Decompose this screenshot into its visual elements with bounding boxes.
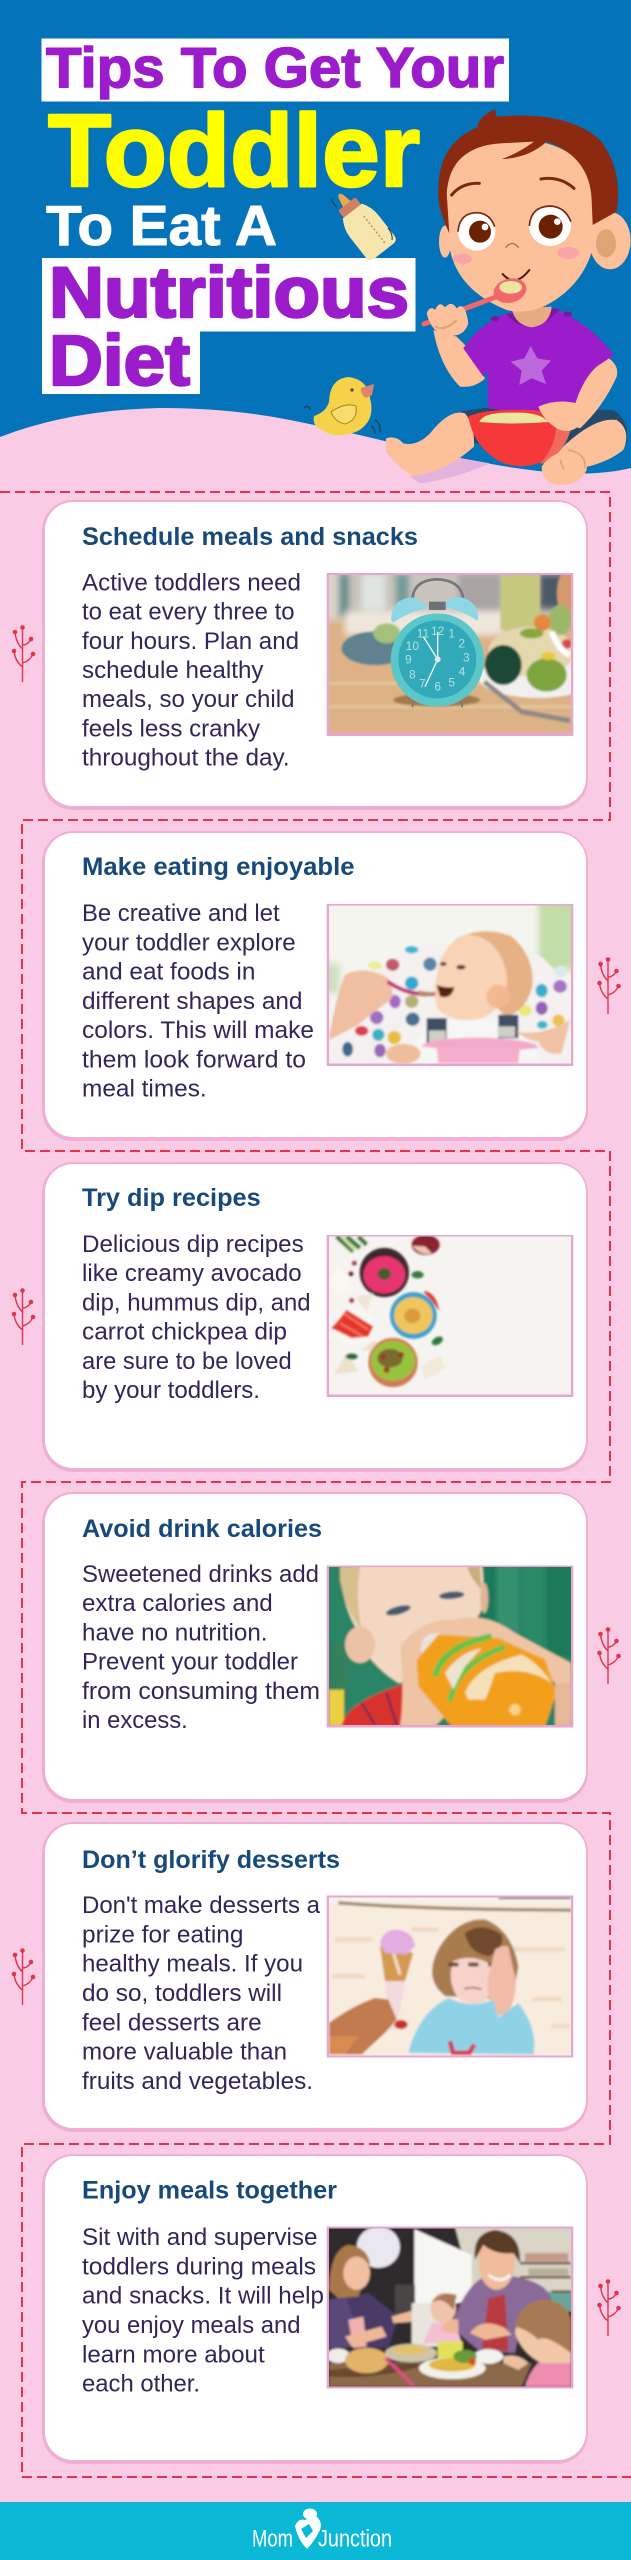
body text: extra calories and [82,1590,273,1617]
body text: throughout the day. [82,744,290,772]
body text: you enjoy meals and [82,2312,300,2339]
body text: Be creative and let [82,900,280,927]
panel: schedule meals and snacks [42,500,598,810]
icon: sprig 5 [12,1948,35,2005]
body text: dip, hummus dip, and [82,1289,311,1316]
nose [506,243,519,248]
body text: from consuming them [82,1678,320,1705]
body text: Don't make desserts a [82,1892,321,1919]
body text: carrot chickpea dip [82,1319,287,1346]
title: Toddler [48,93,420,208]
illustration: toddler eating [386,109,631,485]
left leg [386,412,474,476]
body text: feels less cranky [82,715,260,742]
body text: healthy meals. If you [82,1951,303,1978]
heading: Schedule meals and snacks [82,523,418,551]
body text: feel desserts are [82,2009,262,2036]
body text: Active toddlers need [82,570,301,596]
body text: Delicious dip recipes [82,1231,304,1258]
body text: meal times. [82,1076,207,1102]
title [42,36,509,401]
hand with spoon [427,304,468,336]
title: To Eat A [46,194,277,258]
body text: each other. [82,2371,200,2398]
left arm [433,330,485,387]
photo: alarm clock and salad: 12 [431,624,445,638]
photo: alarm clock and salad: 2 [458,636,465,650]
panel: enjoy meals together [42,2154,588,2464]
logo icon: mother and child heart [295,2508,321,2549]
panel: don't glorify desserts [42,1822,588,2132]
face [447,139,597,312]
hand on bowl [538,401,584,431]
body text: meals, so your child [82,686,294,713]
body text: your toddler explore [82,929,296,956]
hair [438,109,618,233]
shorts [460,406,627,443]
brows [452,183,479,195]
photo: alarm clock and salad: 8 [409,667,416,681]
icon: sprig 2 [597,957,621,1014]
body text [82,1561,320,1734]
dashed connector path [0,492,631,2477]
photo: alarm clock and salad [325,570,598,740]
cheeks [453,253,472,264]
spoon [424,297,497,324]
body text: have no nutrition. [82,1619,268,1646]
shirt [463,308,614,412]
heading: Enjoy meals together [82,2176,337,2204]
photo: baby being spoon fed [325,900,575,1070]
neck [512,307,552,327]
logo text: Mom: Mom [252,2526,293,2552]
icon: yellow duck [304,377,380,435]
right leg [547,420,626,468]
body text: to eat every three to [82,599,294,626]
body text: in excess. [82,1707,188,1734]
photo: alarm clock and salad: 10 [406,639,419,653]
right arm [557,355,617,428]
body text: more valuable than [82,2039,287,2066]
photo: alarm clock and salad: 1 [448,626,455,640]
body text [82,1231,311,1404]
body text: by your toddlers. [82,1377,260,1404]
body text: Prevent your toddler [82,1649,298,1676]
eyes [458,213,495,251]
heading: Don’t glorify desserts [82,1846,340,1874]
body text: learn more about [82,2341,265,2368]
body text: colors. This will make [82,1017,314,1044]
body text: Sweetened drinks add [82,1561,319,1588]
photo: alarm clock and salad: 5 [448,676,455,690]
icon: baby bottle [325,183,398,262]
mouth [503,270,529,280]
icon: sprig 1 [12,625,35,682]
leg shadow [410,457,490,483]
photo: alarm clock and salad: 4 [459,664,466,678]
photo: dips in bowls [325,1230,575,1400]
ears [439,226,451,258]
body text: and eat foods in [82,958,255,986]
body text: do so, toddlers will [82,1980,282,2007]
body text: them look forward to [82,1046,306,1073]
photo: child refusing ice cream [325,1890,575,2060]
header panel [0,0,631,500]
body text: and snacks. It will help [82,2283,324,2310]
body text: four hours. Plan and [82,628,299,655]
heading: Make eating enjoyable [82,853,355,881]
body text [82,570,301,772]
title: Diet [49,322,190,401]
body text: like creamy avocado [82,1260,302,1287]
title: Tips To Get Your [46,36,504,100]
title: Nutritious [49,254,409,333]
body text: are sure to be loved [82,1348,292,1375]
heading: Avoid drink calories [82,1515,322,1543]
photo: alarm clock and salad: 3 [463,650,470,664]
footer [0,2502,631,2560]
logo text: Junction: Junction [318,2526,392,2552]
icon: sprig 6 [597,2279,621,2336]
panel: make eating enjoyable [42,831,588,1141]
photo: child drinking orange soda [325,1560,575,1730]
body text [82,900,314,1102]
body text: Sit with and supervise [82,2224,318,2251]
heading: Try dip recipes [82,1184,261,1212]
panel: avoid drink calories [42,1492,588,1803]
body text: schedule healthy [82,657,264,684]
photo: alarm clock and salad: 7 [419,676,426,690]
icon: sprig 4 [597,1627,621,1684]
body text: prize for eating [82,1921,243,1948]
photo: alarm clock and salad: 6 [434,680,441,694]
body text [82,2224,324,2398]
body text: fruits and vegetables. [82,2068,313,2095]
photo: alarm clock and salad: 9 [405,652,412,666]
bowl [468,410,571,466]
foot [542,449,587,485]
body text: toddlers during meals [82,2253,316,2280]
photo: family eating together [325,2220,575,2390]
panel: try dip recipes [42,1162,588,1472]
photo: alarm clock and salad: 11 [417,626,430,640]
body text [82,1892,321,2095]
body text: different shapes and [82,988,302,1015]
icon: sprig 3 [12,1288,35,1345]
